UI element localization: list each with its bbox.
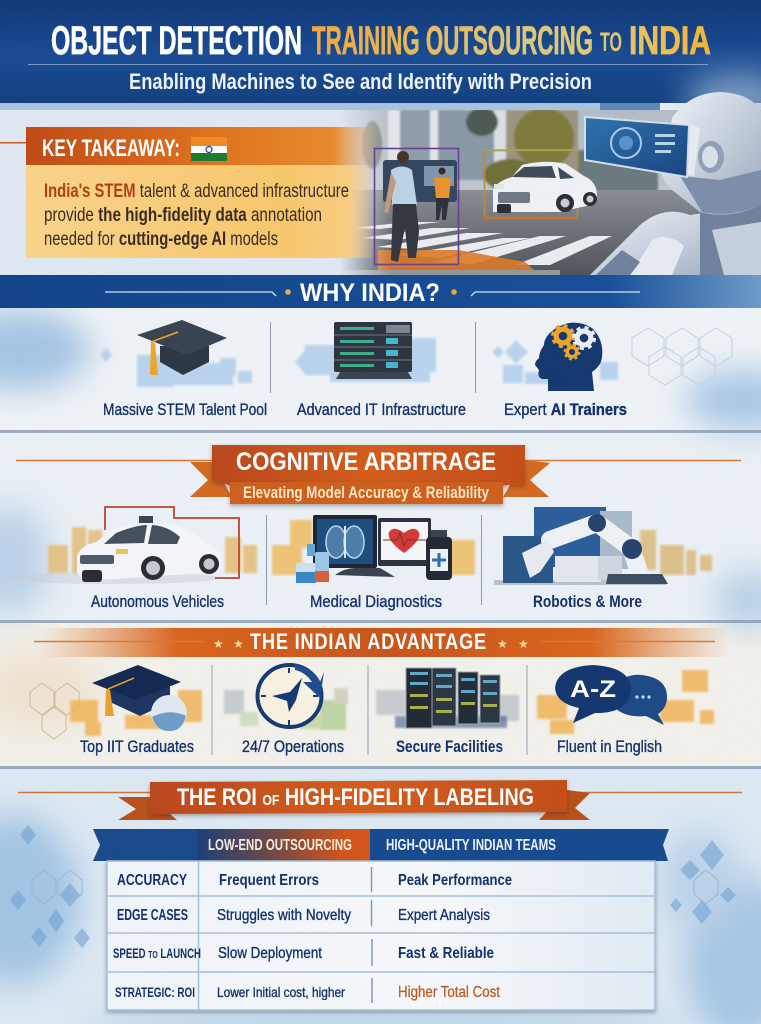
row: accuracy: Frequent Errors <box>219 872 319 889</box>
heading banner: cognitive arbitrage: COGNITIVE ARBITRAGE <box>236 448 496 476</box>
robot figure <box>585 92 761 275</box>
table header <box>93 829 669 861</box>
row: strategic ROI <box>115 984 500 1001</box>
item: 24/7 operations: 24/7 Operations <box>242 737 344 756</box>
item: advanced IT infrastructure: Advanced IT Infrastructure <box>297 400 466 419</box>
street scene photo <box>340 108 761 275</box>
item: autonomous vehicles <box>0 507 257 611</box>
robot visor display <box>585 117 689 177</box>
title: OBJECT DETECTION <box>51 19 302 63</box>
icon: white car <box>77 516 222 582</box>
row: speed to launch: Slow Deployment <box>218 945 322 962</box>
heading band: why India <box>0 275 761 308</box>
table body <box>107 861 655 1010</box>
detected car bounding box <box>484 150 597 218</box>
heading banner: cognitive arbitrage: Elevating Model Accuracy & Reliability <box>243 483 489 502</box>
row: strategic ROI: STRATEGIC: ROI <box>115 984 195 1000</box>
panel: why India <box>100 320 732 419</box>
row: speed to launch: SPEED TO LAUNCH <box>113 945 201 961</box>
key takeaway banner: KEY TAKEAWAY: <box>42 135 180 162</box>
item: STEM talent pool <box>100 320 267 419</box>
heading banner: ROI of high-fidelity labeling: THE ROI OF HIGH-FIDELITY LABELING <box>177 784 534 811</box>
item: fluent in English <box>537 665 714 756</box>
panel: key takeaway and street scene <box>0 92 761 275</box>
icon: head with gears <box>535 323 602 391</box>
title: INDIA <box>629 19 711 63</box>
title <box>51 19 711 63</box>
crosswalk <box>352 222 612 265</box>
heading band: the Indian advantage: THE INDIAN ADVANTAGE <box>250 629 487 654</box>
item: secure facilities <box>376 668 519 756</box>
pedestrian bounding box <box>374 148 458 264</box>
row: strategic ROI: Higher Total Cost <box>398 984 500 1001</box>
decorative hexagon network <box>632 328 732 385</box>
heading band: the Indian advantage: ★ <box>233 637 244 651</box>
icon: graduation cap and globe <box>92 665 187 731</box>
heading band: the Indian advantage <box>34 628 730 657</box>
item: medical diagnostics: Medical Diagnostics <box>310 592 442 611</box>
row: edge cases: Struggles with Novelty <box>217 907 351 924</box>
row: accuracy <box>117 872 512 889</box>
row: speed to launch <box>113 945 494 962</box>
table header: HIGH-QUALITY INDIAN TEAMS <box>386 837 556 854</box>
heading band: why India: WHY INDIA? <box>300 279 440 307</box>
icon: speech bubbles: A-Z <box>570 676 616 703</box>
row: accuracy: Peak Performance <box>398 872 512 889</box>
dividers <box>270 322 476 393</box>
header band <box>0 0 761 124</box>
heading banner: cognitive arbitrage <box>16 445 741 504</box>
item: secure facilities: Secure Facilities <box>396 737 503 756</box>
icon: graduation cap <box>137 320 227 375</box>
bus in background <box>383 160 457 202</box>
heading band: the Indian advantage: ★ <box>213 637 224 651</box>
row: edge cases <box>117 907 490 924</box>
heading band: the Indian advantage: ★ <box>518 637 529 651</box>
icon: speech bubbles <box>555 665 667 725</box>
icon: diagnostic monitors and vials <box>296 515 452 583</box>
decorative diamonds and hexagons <box>10 825 736 948</box>
item: expert AI trainers: Expert AI Trainers <box>504 400 627 419</box>
key takeaway text panel: provide the high-fidelity data annotation <box>44 205 322 226</box>
icon: clock <box>258 664 324 727</box>
table header: LOW-END OUTSOURCING <box>208 837 352 854</box>
key takeaway text panel: needed for cutting-edge AI models <box>44 229 278 250</box>
subtitle: Enabling Machines to See and Identify with Precision <box>129 69 592 94</box>
icon: Indian flag <box>191 137 227 161</box>
item: top IIT graduates <box>30 665 202 756</box>
title: TO <box>600 27 622 57</box>
item: 24/7 operations <box>224 664 348 756</box>
row: edge cases: Expert Analysis <box>398 907 490 924</box>
key takeaway text panel: India's STEM talent & advanced infrastructure <box>44 181 349 202</box>
heading banner: ROI of high-fidelity labeling <box>18 780 742 820</box>
second pedestrian <box>438 168 446 174</box>
row: strategic ROI: Lower Initial cost, higher <box>217 984 345 1000</box>
row: speed to launch: Fast & Reliable <box>398 945 494 962</box>
row: accuracy: ACCURACY <box>117 872 187 889</box>
icon: robotic arm <box>503 507 668 584</box>
item: autonomous vehicles: Autonomous Vehicles <box>91 592 224 611</box>
row: edge cases: EDGE CASES <box>117 907 188 924</box>
item: advanced IT infrastructure <box>295 322 466 419</box>
panel: cognitive arbitrage use cases <box>0 507 712 611</box>
item: fluent in English: Fluent in English <box>557 737 662 756</box>
key takeaway banner <box>0 127 376 165</box>
item: medical diagnostics <box>272 515 475 611</box>
icon: server rack <box>334 322 412 379</box>
item: top IIT graduates: Top IIT Graduates <box>80 737 194 756</box>
item: robotics and more <box>494 507 712 611</box>
comparison table <box>93 829 669 1010</box>
heading band: the Indian advantage: ★ <box>497 637 508 651</box>
item: expert AI trainers <box>492 323 627 419</box>
icon: server racks <box>406 668 500 728</box>
key takeaway text panel <box>26 165 376 258</box>
item: robotics and more: Robotics & More <box>533 592 642 611</box>
panel: the Indian advantage <box>30 664 714 756</box>
item: STEM talent pool: Massive STEM Talent Pool <box>103 400 267 419</box>
